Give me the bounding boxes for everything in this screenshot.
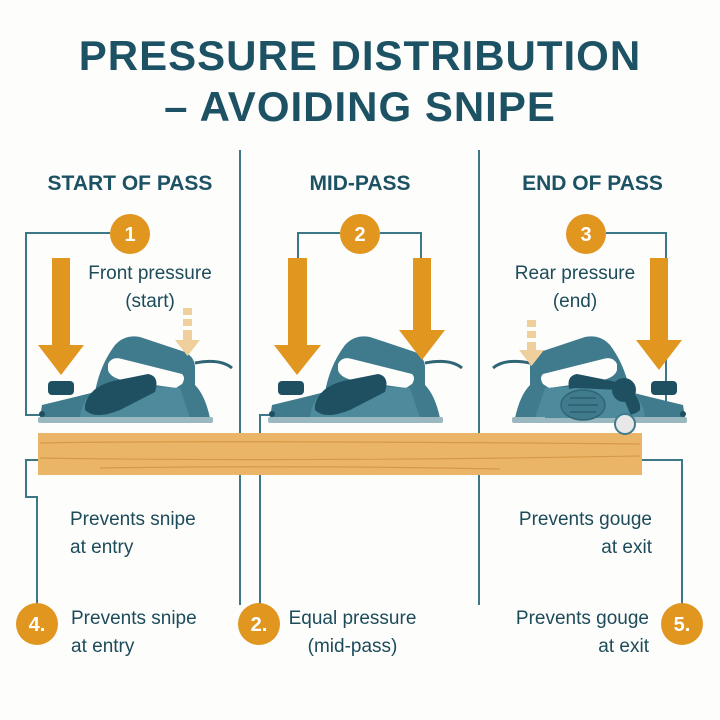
text: prevents gouge: at exit [601,537,652,558]
planer: start [38,336,232,423]
text: prevents gouge: Prevents gouge [519,509,652,530]
diagram: 1 [124,224,136,246]
label: front pressure: (start) [125,291,175,312]
heading: end of pass: END OF PASS [522,172,663,195]
planer: mid [268,336,462,423]
bottom text 5 [516,608,649,657]
text: prevents snipe: Prevents snipe [70,509,196,530]
label: front pressure: Front pressure [88,263,212,284]
diagram: 3 [580,224,592,246]
board [38,433,642,475]
diagram: 2. [251,614,267,636]
bottom text 2 [289,608,416,657]
heading: start of pass: START OF PASS [48,172,212,195]
heading: mid-pass: MID-PASS [309,172,411,195]
bottom text 5: Prevents gouge [516,608,649,629]
label: front pressure [88,263,212,312]
planer: end [493,336,687,423]
diagram: 5. [674,614,690,636]
bottom text 5: at exit [598,636,649,657]
label: rear pressure: (end) [553,291,597,312]
label: rear pressure: Rear pressure [515,263,635,284]
bottom text 2: Equal pressure [289,608,416,629]
label: rear pressure [515,263,635,312]
title: – AVOIDING SNIPE [164,83,556,130]
bottom text 4 [71,608,197,657]
vent on end planer [545,378,636,434]
diagram: 2 [354,224,366,246]
title [79,32,641,130]
dashed arrows [175,308,544,366]
bottom text 4: Prevents snipe [71,608,197,629]
text: prevents gouge [519,509,652,558]
diagram: 4. [29,614,45,636]
bottom text 4: at entry [71,636,134,657]
number circles [16,214,703,645]
dividers [239,150,241,605]
text: prevents snipe [70,509,196,558]
arrows [38,258,682,375]
connector lines [26,233,684,604]
text: prevents snipe: at entry [70,537,133,558]
title: PRESSURE DISTRIBUTION [79,32,641,79]
bottom text 2: (mid-pass) [308,636,397,657]
